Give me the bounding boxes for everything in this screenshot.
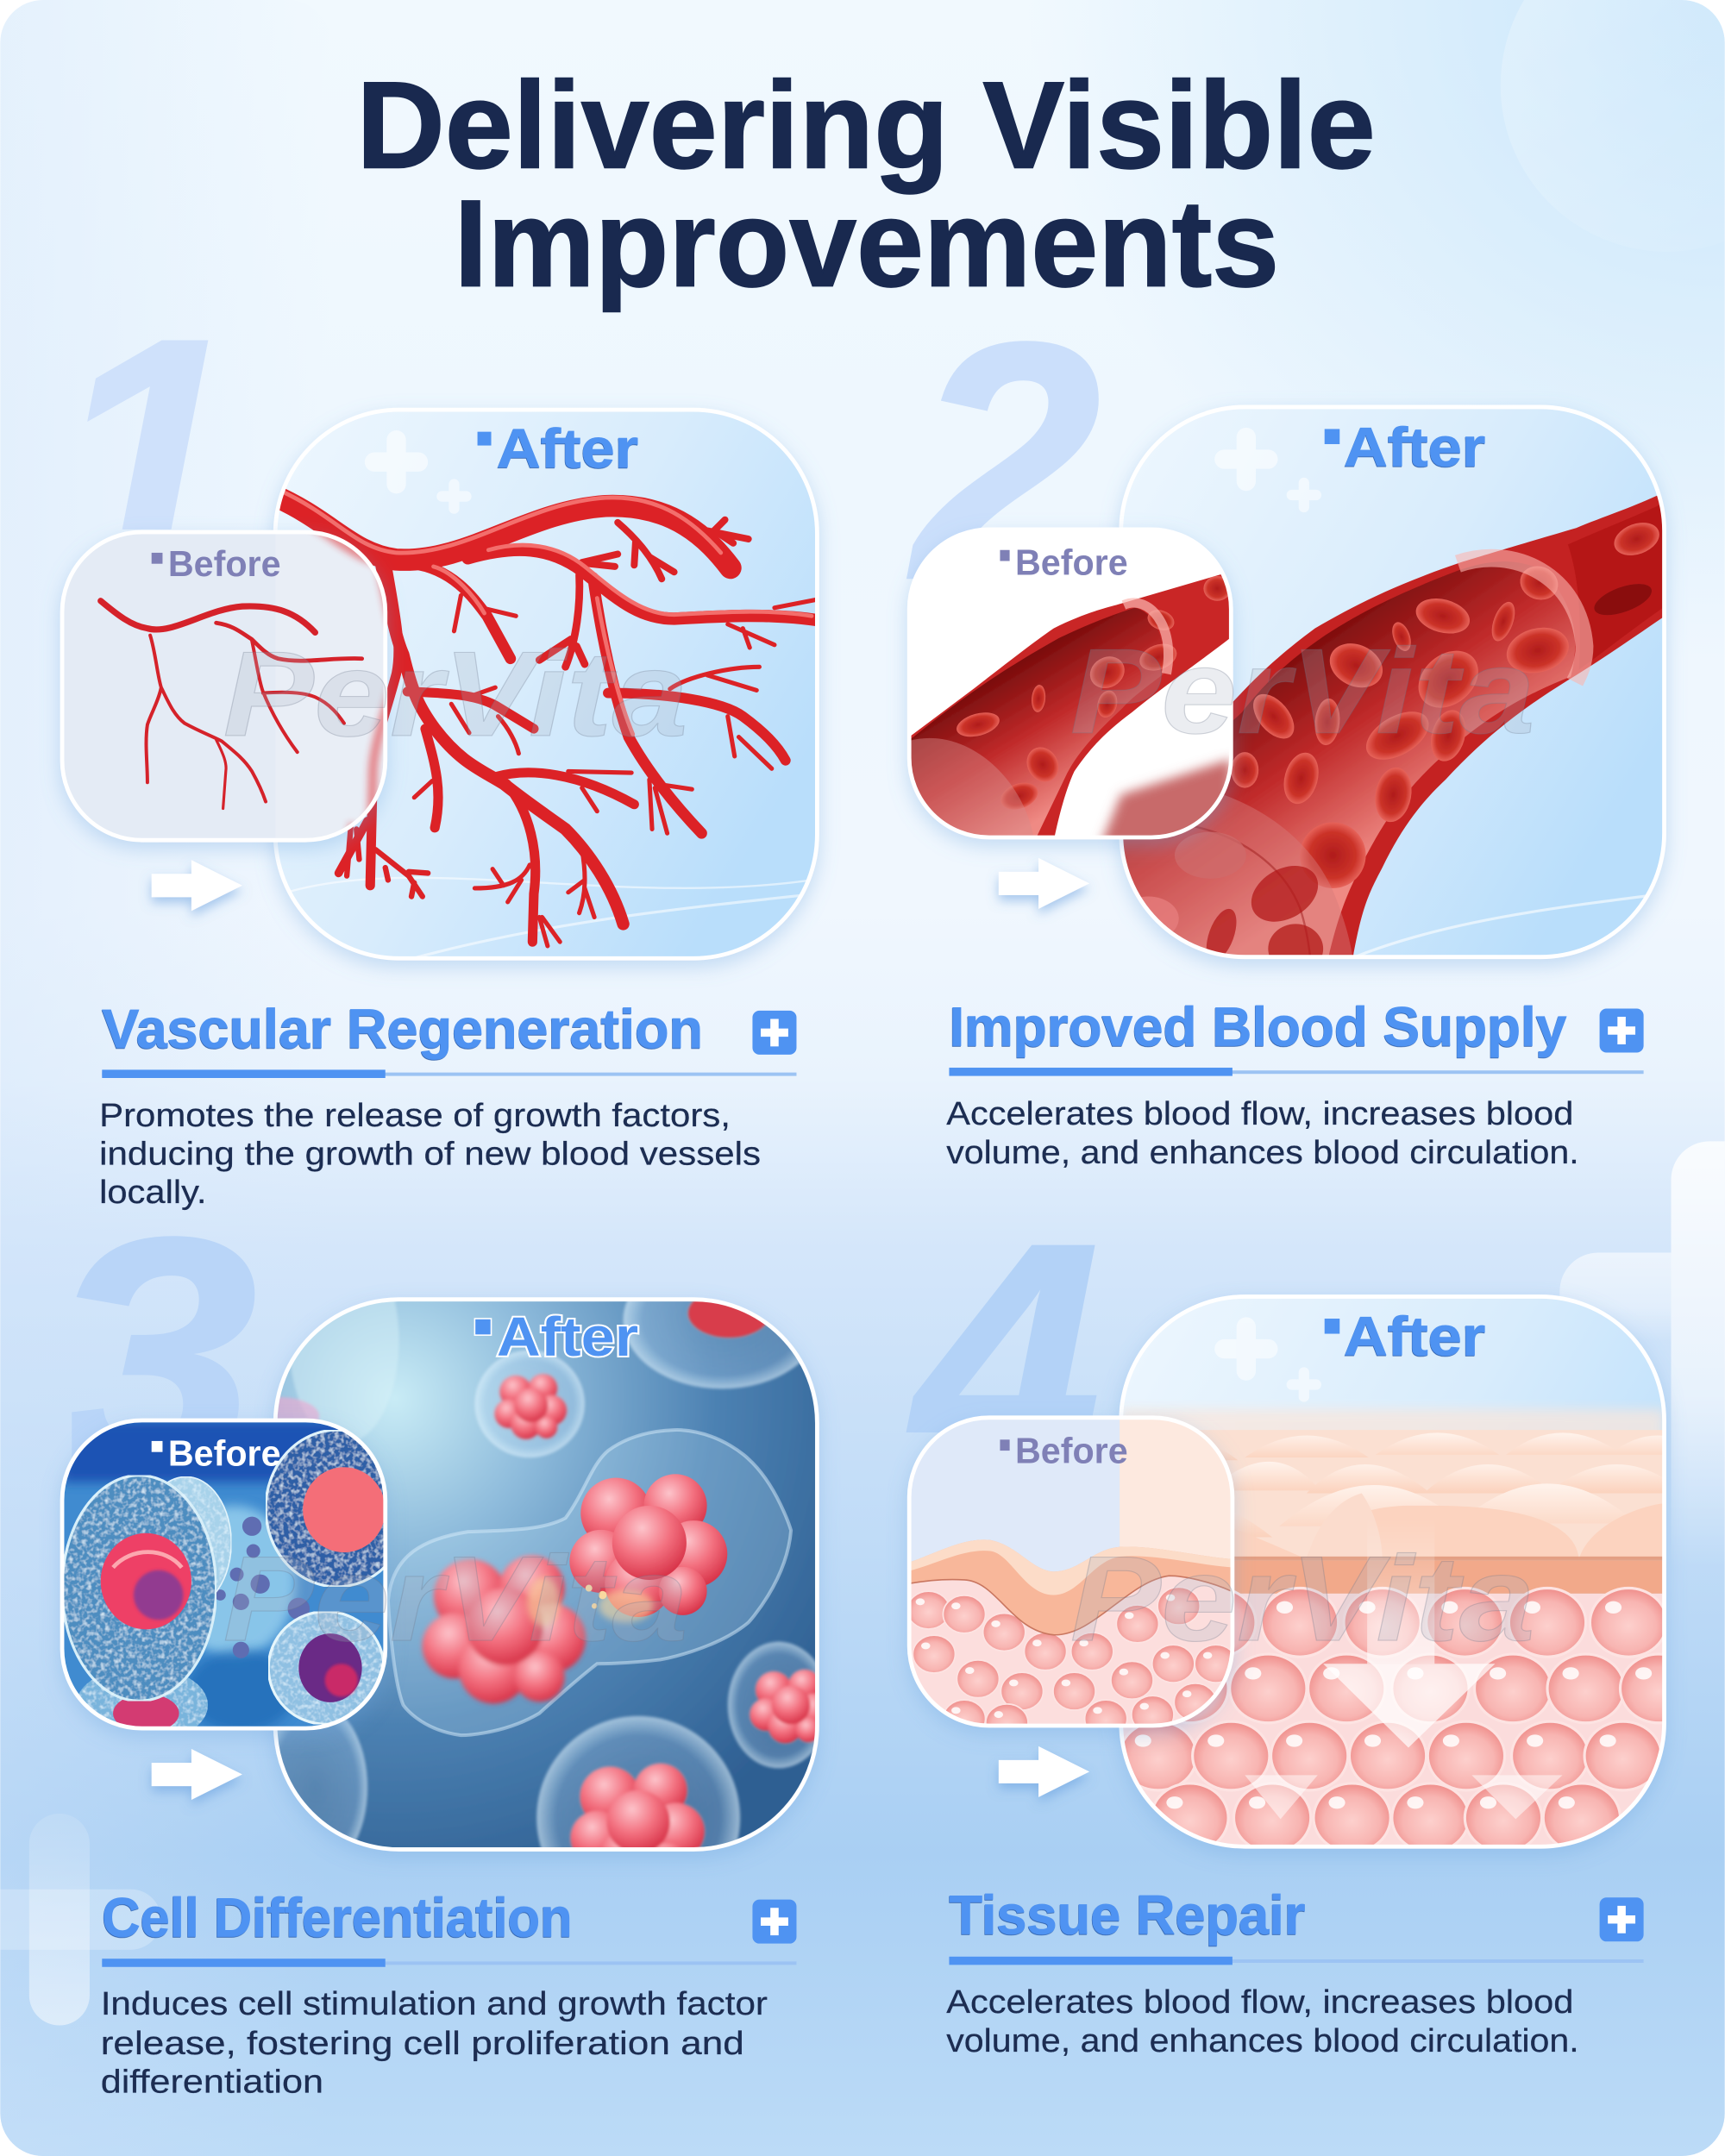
after image: skin layers and cells [1087, 1297, 1705, 1855]
caption 4: tissue repair: volume, and enhances blood circulation. [946, 2022, 1579, 2059]
before label: Before [1015, 1430, 1128, 1470]
caption 1: vascular regeneration: inducing the growth of new blood vessels [99, 1135, 761, 1172]
caption 4: tissue repair: Tissue Repair [949, 1884, 1305, 1946]
after label: After [1344, 416, 1485, 478]
after label: After [497, 1306, 638, 1368]
title: Delivering Visible [356, 57, 1376, 195]
caption 3: cell differentiation: Cell Differentiation [102, 1887, 573, 1949]
panel 3: cell differentiation [47, 1168, 831, 1920]
caption 2: improved blood supply [946, 996, 1644, 1171]
after image: blood vessel with red cells [1117, 407, 1667, 974]
title: Improvements [454, 175, 1279, 313]
white repair arrows [1245, 1551, 1563, 1820]
before image: cells with nuclei [62, 1420, 409, 1744]
arrow [999, 858, 1089, 909]
before label: Before [168, 1433, 281, 1474]
caption 1: vascular regeneration [99, 998, 796, 1211]
caption 2: improved blood supply: Improved Blood Supply [949, 996, 1567, 1058]
number 4: 4 [903, 1173, 1101, 1550]
decoration: top right circle [1501, 0, 1725, 252]
after label: After [1344, 1305, 1485, 1367]
caption 1: vascular regeneration: Vascular Regeneration [102, 998, 703, 1060]
caption 4: tissue repair: Accelerates blood flow, increases blood [946, 1984, 1573, 2021]
caption 1: vascular regeneration: locally. [99, 1174, 206, 1211]
number 1: 1 [53, 268, 240, 645]
caption 2: improved blood supply: volume, and enhances blood circulation. [946, 1134, 1579, 1171]
caption 3: cell differentiation: Induces cell stimulation and growth factor [101, 1985, 768, 2022]
panel 2: improved blood supply [904, 273, 1667, 974]
title [356, 57, 1376, 313]
panel 4: tissue repair [902, 1245, 1675, 1858]
watermark: PerVita [223, 626, 688, 761]
watermark: PerVita [1070, 1531, 1535, 1666]
decoration: large right cross [1559, 1141, 1725, 1568]
caption 1: vascular regeneration: Promotes the release of growth factors, [99, 1097, 731, 1134]
number 3: 3 [47, 1168, 257, 1545]
panel 1: vascular regeneration [53, 268, 817, 958]
before label: Before [1015, 542, 1128, 582]
caption 4: tissue repair [946, 1884, 1644, 2059]
before image: damaged skin [906, 1418, 1237, 1742]
arrow [152, 1749, 242, 1800]
watermark: PerVita [223, 1531, 688, 1666]
arrow [152, 860, 242, 911]
number 2: 2 [908, 273, 1101, 649]
before image: sparse vessels [53, 526, 398, 859]
caption 3: cell differentiation [101, 1887, 796, 2101]
after image: branching vessels [273, 410, 817, 958]
before label: Before [168, 543, 281, 584]
before image: narrow vessel [904, 530, 1233, 846]
caption 3: cell differentiation: release, fostering cell proliferation and [101, 2025, 744, 2062]
arrow [999, 1746, 1089, 1797]
caption 3: cell differentiation: differentiation [101, 2064, 323, 2101]
decoration: bottom left cross [0, 1814, 161, 2026]
watermark: PerVita [1070, 624, 1535, 759]
caption 2: improved blood supply: Accelerates blood flow, increases blood [946, 1095, 1573, 1132]
after label: After [497, 417, 638, 479]
after image: dividing cells [267, 1297, 826, 1861]
